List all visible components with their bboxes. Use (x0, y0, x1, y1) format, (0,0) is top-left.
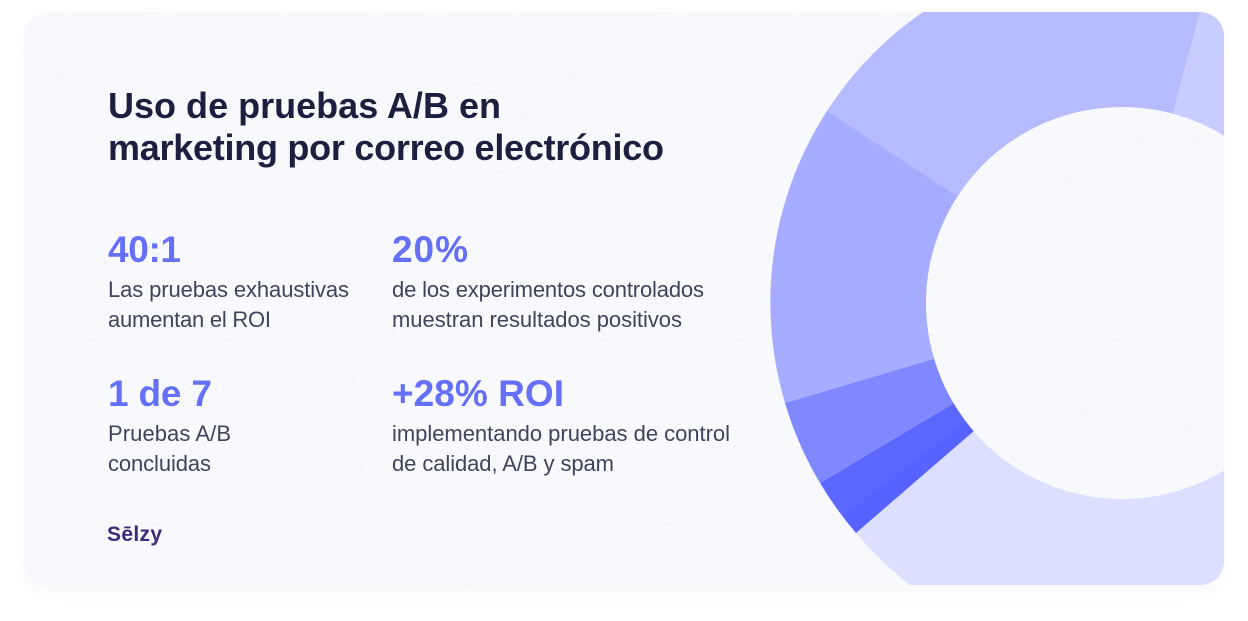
stat: 20%: de los experimentos controlados (392, 277, 704, 302)
stat: 20% (392, 229, 704, 332)
stat: 40:1 (108, 229, 349, 332)
stat: 40:1: 40:1 (108, 229, 181, 270)
stat: +28% ROI: +28% ROI (392, 373, 564, 414)
stat: +28% ROI: implementando pruebas de control (392, 421, 730, 446)
stat: 20%: muestran resultados positivos (392, 307, 682, 332)
segment: medium blue (785, 358, 954, 483)
stat: 40:1: Las pruebas exhaustivas (108, 277, 349, 302)
title (108, 85, 664, 168)
donut chart (770, 12, 1248, 585)
segment: pale lavender bottom (856, 431, 1224, 585)
stat: 1 de 7: concluidas (108, 451, 211, 476)
title: marketing por correo electrónico (108, 127, 664, 168)
stat: 40:1: aumentan el ROI (108, 307, 271, 332)
logo: Selzy: Sēlzy (107, 523, 162, 546)
stat: +28% ROI: de calidad, A/B y spam (392, 451, 614, 476)
segment: palest lilac top right (1173, 12, 1224, 136)
stat: 1 de 7: Pruebas A/B (108, 421, 231, 446)
segment: strong blue darker sliver (850, 432, 973, 533)
stat: 1 de 7: 1 de 7 (108, 373, 212, 414)
title: Uso de pruebas A/B en (108, 85, 501, 126)
donut hole (926, 107, 1224, 499)
segment: light periwinkle top (827, 12, 1200, 196)
stat: +28% ROI (392, 373, 730, 476)
stat: 1 de 7 (108, 373, 231, 476)
stat: 20%: 20% (392, 229, 468, 270)
segment: periwinkle left (770, 111, 958, 403)
segment: strong blue (820, 404, 973, 533)
